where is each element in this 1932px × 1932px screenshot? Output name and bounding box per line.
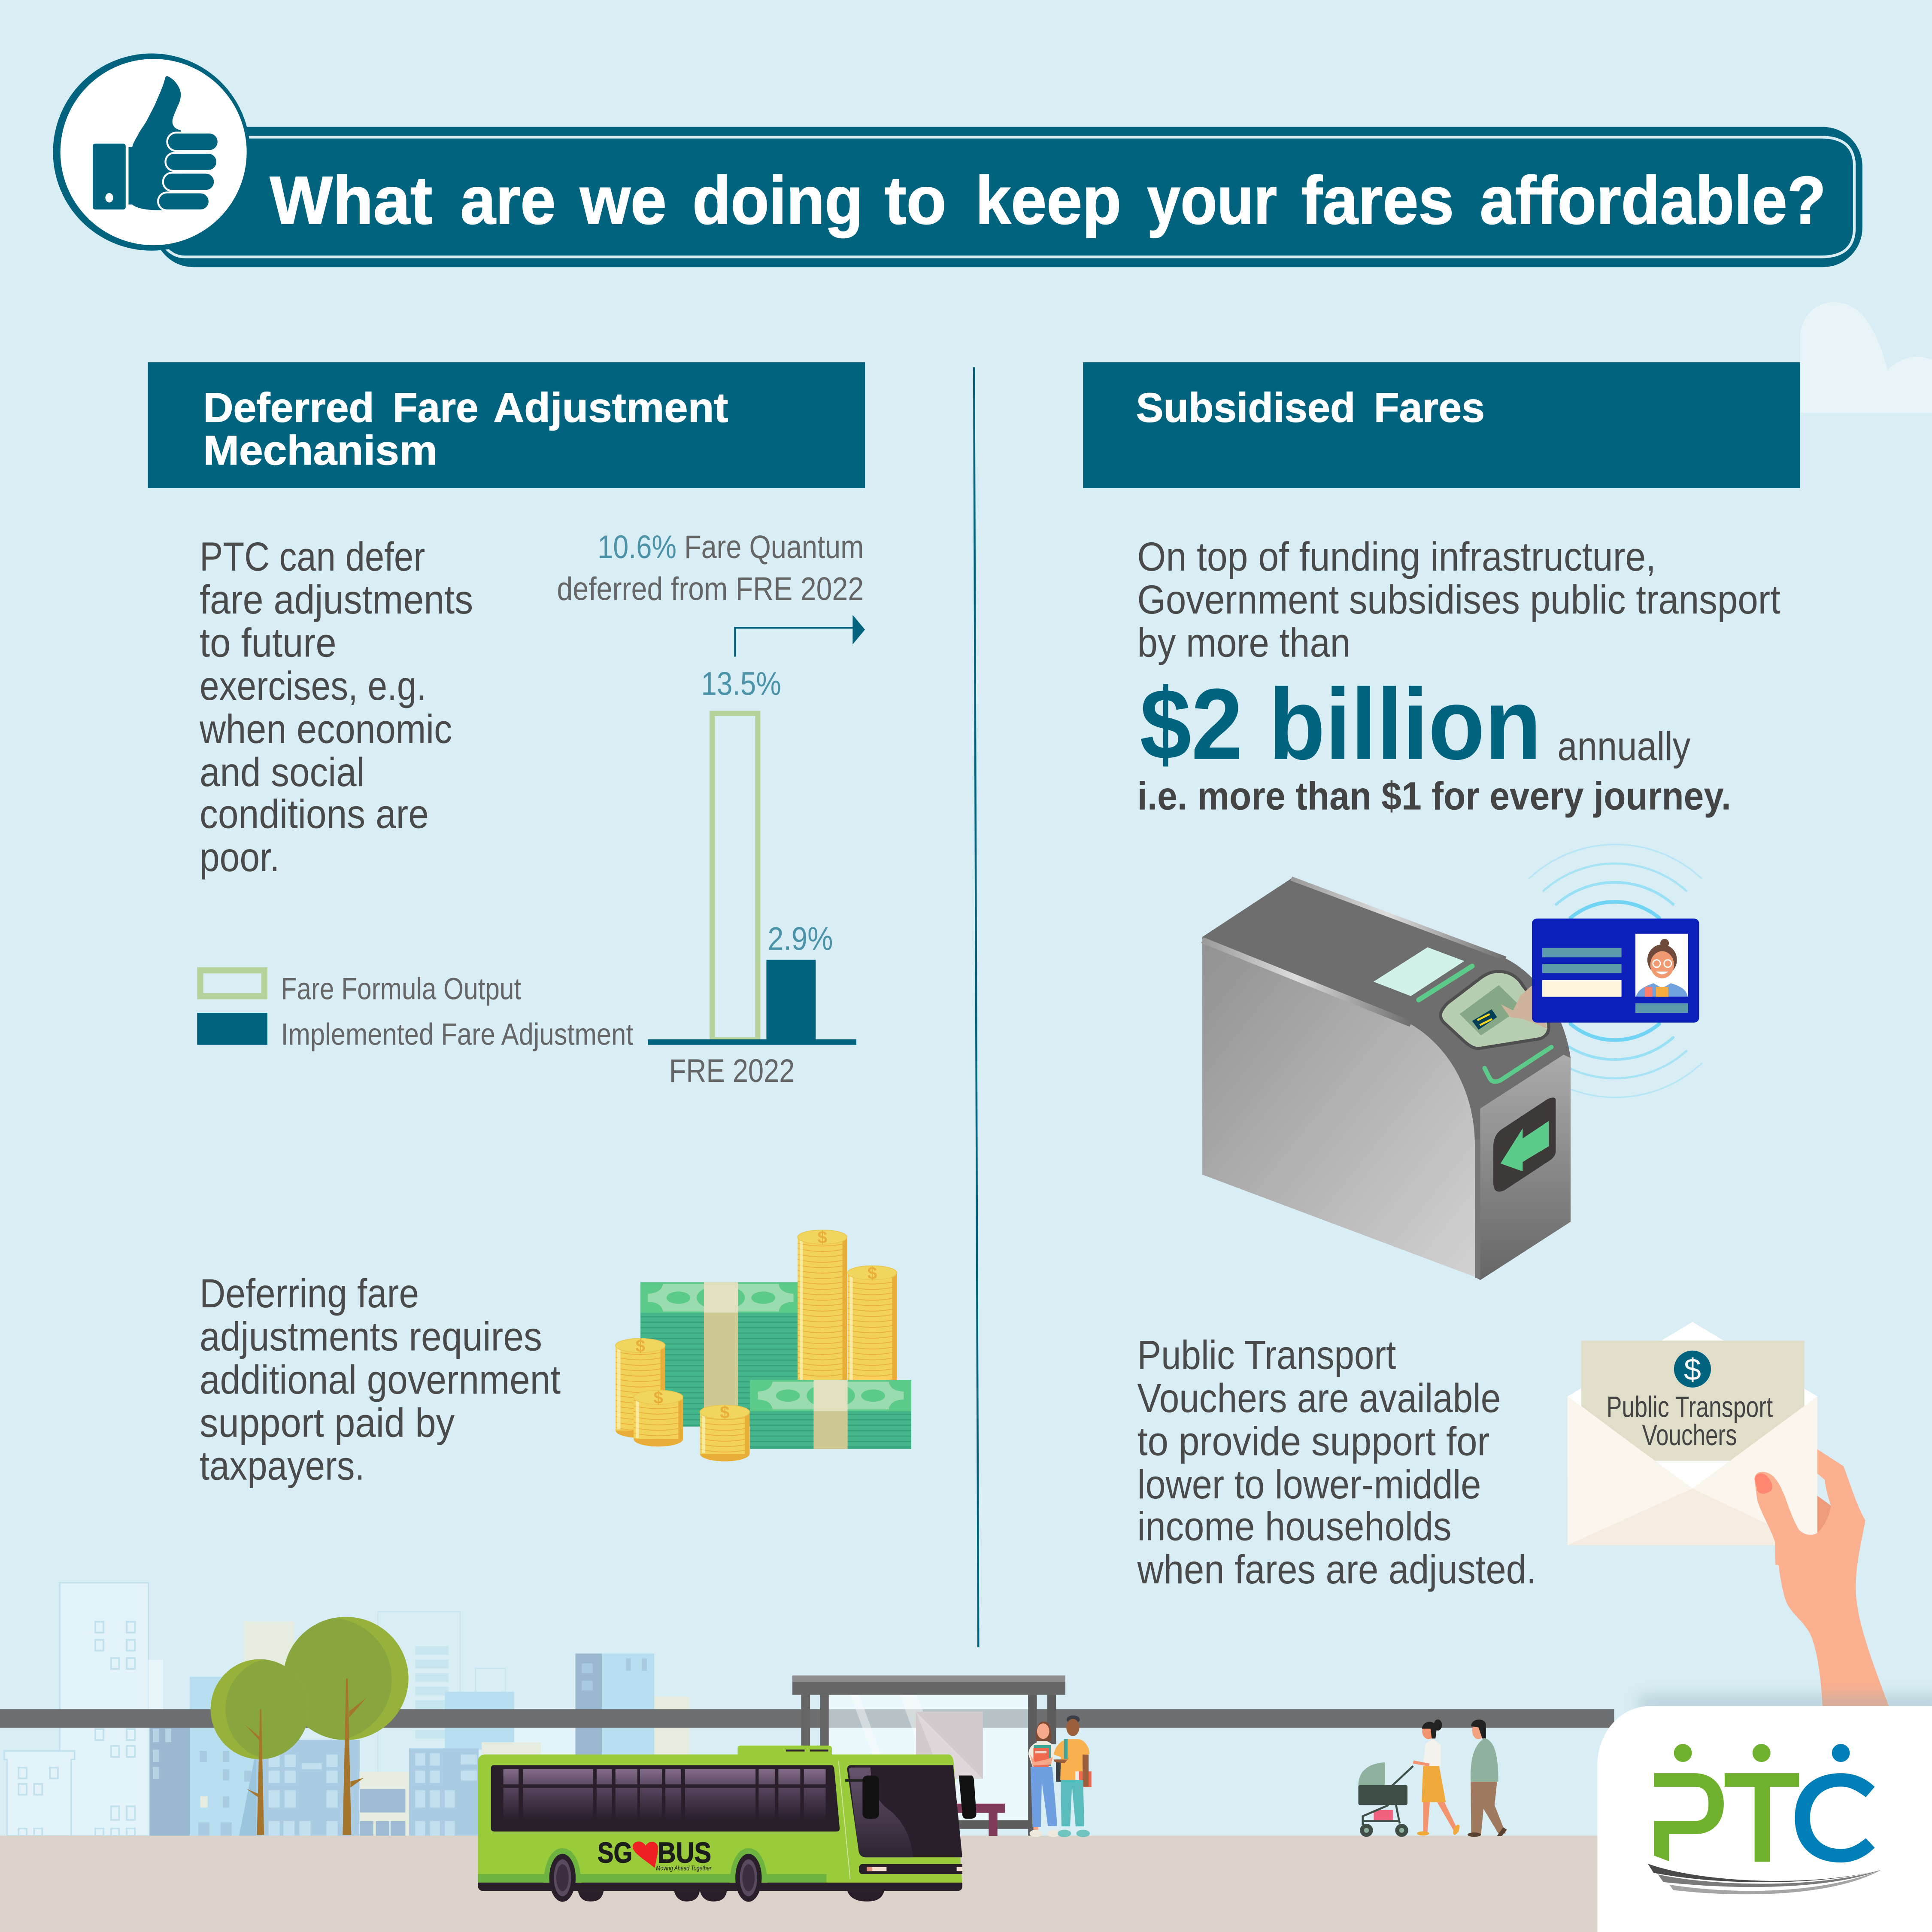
icon: money and coins [616,1228,911,1461]
windshield [838,1761,977,1879]
SG bus logo: SG [597,1837,632,1869]
arrow [735,615,865,657]
section heading: Deferred [203,385,374,431]
girl [1028,1722,1060,1837]
explanatory text: poor. [200,835,280,880]
title: to [885,163,946,238]
voucher card: $ [1684,1352,1701,1387]
tall coin stacks: $ [867,1264,877,1283]
title: doing [692,163,863,238]
big number: $2 billion [1140,668,1541,781]
taxpayers text: taxpayers. [200,1443,365,1489]
elevated road band [0,1709,1614,1728]
explanatory text: to future [200,620,337,666]
wheel arches and wheels [543,1848,767,1902]
subsidy text: On top of funding infrastructure, [1137,534,1656,580]
hand behind envelope [1775,1449,1889,1706]
title: What [270,163,433,238]
card signal waves [1529,844,1701,1097]
direction arrow [1493,1097,1556,1192]
deferred quantum label: deferred from FRE 2022 [557,571,864,608]
voucher text: income households [1137,1504,1451,1549]
voucher text: to provide support for [1137,1419,1489,1464]
title: are [460,163,556,238]
logo panel [1597,1706,1932,1932]
panel: subsidised fares [1083,362,1800,1592]
subsidy text: Government subsidises public transport [1137,577,1780,623]
voucher card: Vouchers [1642,1419,1737,1452]
family with stroller [1358,1719,1507,1837]
icon: thumbs up [53,54,250,251]
explanatory text: fare adjustments [200,577,473,623]
city skyline [4,1583,689,1836]
title: fares [1301,163,1454,238]
voucher illustration [1568,1322,1889,1706]
card photo [1635,934,1688,997]
nail [1755,1473,1772,1494]
side windows [491,1765,840,1832]
illustration: fare gate [1202,844,1701,1280]
voucher text: when fares are adjusted. [1137,1547,1537,1592]
voucher card [1581,1340,1805,1461]
stroller [1358,1762,1413,1837]
PTC logo [1648,1744,1881,1894]
explanatory text: and social [200,750,365,795]
SG bus logo: Moving Ahead Together [656,1865,712,1872]
woman [1413,1719,1461,1836]
passengers at bus stop [1028,1715,1092,1837]
explanatory text: PTC can defer [200,534,425,580]
section heading [148,362,865,488]
legend: Implemented Fare Adjustment [281,1018,634,1052]
thumb [1754,1472,1823,1565]
bar chart: 13.5% [701,666,781,702]
taxpayers text: support paid by [200,1400,455,1446]
concession card [1532,919,1699,1023]
section heading: Mechanism [203,428,437,474]
subsidy text: by more than [1137,620,1350,666]
cloud [1800,302,1932,413]
taxpayers text: Deferring fare [200,1271,419,1316]
ground [0,1836,1602,1932]
roof unit [738,1746,832,1755]
taxpayers text: adjustments requires [200,1314,542,1359]
centre divider [974,367,978,1647]
explanatory text [199,534,473,880]
deferred quantum label [557,529,864,608]
title: keep [975,163,1121,238]
legend [197,970,634,1052]
green tick light [1485,1047,1551,1081]
voucher text: lower to lower-middle [1137,1462,1481,1507]
short coin stacks: $ [636,1336,645,1355]
front cash stack [750,1380,911,1449]
SG bus logo [597,1837,712,1872]
bar chart [648,666,856,1089]
bus shelter [792,1675,1065,1836]
title [270,163,1826,238]
section heading: Fares [1374,385,1485,431]
gate top [1202,878,1571,1146]
grille and lights [859,1864,962,1874]
voucher text: Public Transport [1137,1332,1396,1378]
white pocket [1654,1461,1730,1488]
bar chart: FRE 2022 [669,1053,795,1089]
short coin stacks: $ [720,1403,730,1422]
gate left side [1202,939,1475,1277]
tall coin stacks: $ [818,1228,827,1247]
section heading: Fare [393,385,479,431]
big number: annually [1557,724,1691,769]
bus [478,1746,977,1902]
rear wheels [578,1890,884,1902]
explanatory text: conditions are [200,792,429,837]
gate front [1475,1055,1571,1280]
bar chart: 2.9% [767,921,833,957]
title: we [579,163,667,238]
ticket panel [1374,947,1464,996]
tall coin stacks [798,1228,897,1382]
trees [211,1617,409,1835]
man [1468,1719,1507,1837]
legend: Fare Formula Output [281,972,521,1006]
envelope back [1568,1322,1817,1479]
body [478,1754,962,1891]
section heading: Subsidised [1136,385,1356,431]
header banner [154,127,1862,267]
explanatory text: exercises, e.g. [200,663,426,709]
boy [1053,1715,1092,1837]
subsidy text [1137,534,1780,666]
voucher card: Public Transport [1607,1390,1773,1423]
envelope front [1568,1396,1817,1545]
section heading: Adjustment [493,385,728,431]
title: your [1147,163,1277,238]
short coin stacks: $ [654,1388,663,1407]
SG bus logo: BUS [658,1837,711,1869]
explanatory text: when economic [199,707,452,752]
short coin stacks [616,1336,749,1461]
finger shadow [1817,1496,1831,1533]
section heading [1083,362,1800,488]
voucher text: Vouchers are available [1137,1376,1501,1421]
voucher text [1137,1332,1537,1592]
title: affordable? [1480,163,1826,238]
card reader [1441,972,1549,1048]
gap between fingers [1817,1473,1831,1506]
deferred quantum label: 10.6% Fare Quantum [597,529,864,565]
back cash stack [640,1282,798,1427]
taxpayers text [200,1271,561,1489]
per journey line: i.e. more than $1 for every journey. [1137,775,1731,818]
panel: deferred fare adjustment [148,362,911,1489]
taxpayers text: additional government [200,1357,561,1403]
shadow above logo panel [1639,1695,1932,1713]
